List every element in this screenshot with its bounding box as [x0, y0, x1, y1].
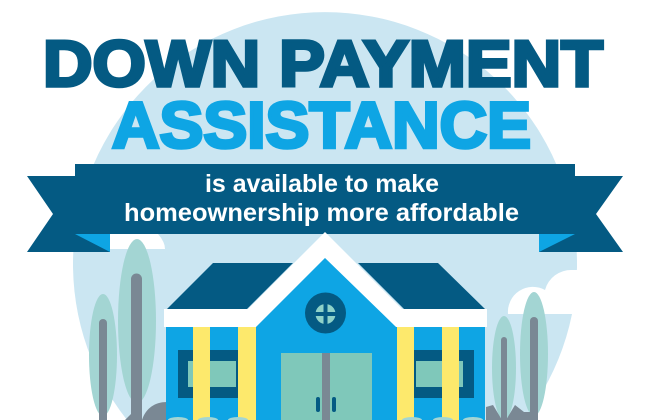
ribbon right tail — [539, 176, 623, 252]
window frame: right — [413, 350, 474, 398]
tree: right tall — [520, 292, 548, 416]
column: right inner — [397, 327, 414, 420]
title: assistance: ASSISTANCE — [112, 88, 531, 162]
tree: left small — [89, 294, 117, 416]
window glass — [316, 304, 336, 324]
window: left — [178, 350, 238, 398]
door divider — [322, 353, 330, 420]
column: right outer — [442, 327, 459, 420]
column: left outer — [193, 327, 210, 420]
trunk: left small — [99, 319, 107, 420]
tree: left tall — [118, 239, 156, 403]
door panels — [281, 353, 372, 420]
window: right — [413, 350, 474, 398]
window pane: left — [188, 361, 236, 387]
door handle: left — [316, 397, 320, 412]
trunk: right small — [501, 337, 507, 420]
column: left inner — [238, 327, 256, 420]
round attic window — [305, 292, 346, 334]
front door — [281, 353, 372, 420]
window ring — [305, 292, 346, 334]
house — [164, 232, 487, 420]
tree: right small — [492, 316, 516, 420]
shrub: right — [486, 405, 538, 420]
window pane: right — [416, 361, 463, 387]
trunk: right tall — [530, 317, 538, 420]
ribbon left tail — [27, 176, 110, 252]
porch bushes — [168, 417, 483, 420]
roof panel: left — [167, 263, 293, 309]
shrub: left — [125, 402, 167, 420]
trees: right — [486, 292, 548, 420]
roof panel: right — [358, 263, 485, 309]
house body — [166, 327, 485, 420]
cloud: right — [508, 270, 650, 314]
cloud: left — [100, 234, 165, 249]
door handle: right — [332, 397, 336, 412]
ribbon right fold — [539, 234, 575, 252]
trees: left — [89, 239, 167, 420]
title: down payment: DOWN PAYMENT — [43, 27, 603, 100]
ribbon text line 2: homeownership more affordable — [124, 199, 519, 227]
ribbon text line 1: is available to make — [205, 170, 439, 198]
ribbon banner — [27, 164, 623, 252]
gable front — [256, 258, 396, 420]
window cross bars — [313, 302, 338, 326]
window frame: left — [178, 350, 238, 398]
white eaves and gable — [164, 232, 487, 327]
ribbon left fold — [75, 234, 110, 252]
ribbon centre — [75, 164, 575, 234]
trunk: left tall — [131, 274, 142, 420]
background circle — [73, 12, 577, 420]
